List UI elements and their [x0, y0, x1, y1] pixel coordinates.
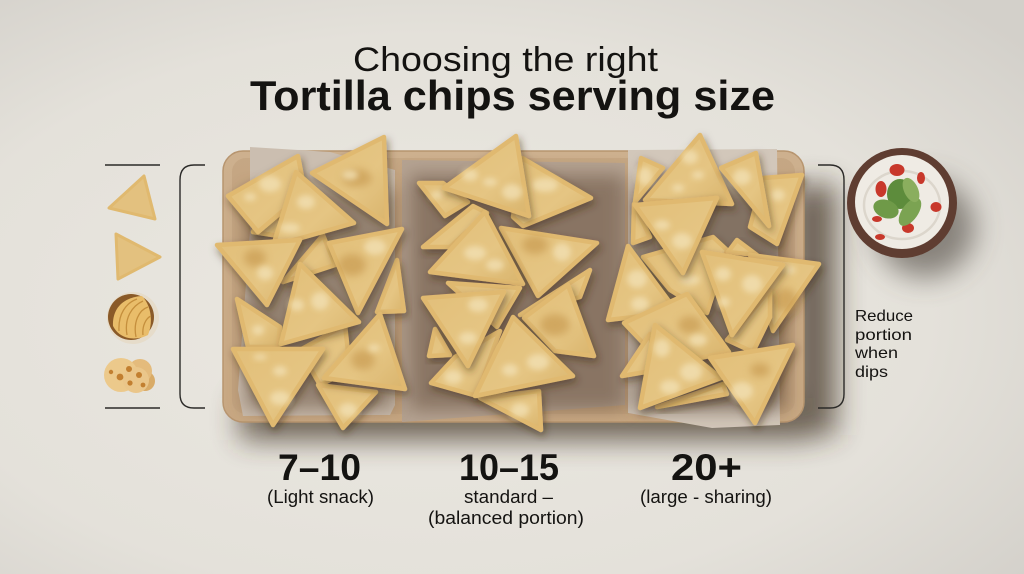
left bracket: [180, 165, 205, 408]
label: 10-15 standard: (balanced portion): [428, 508, 584, 528]
basil leaves: [871, 175, 926, 230]
label: 10-15 standard: 10–15: [459, 447, 559, 488]
label: 7-10 light snack: 7–10: [278, 447, 361, 488]
icon: lotus-shaped chips: [104, 358, 155, 393]
chip pile: 7-10 light snack: [217, 137, 405, 428]
icon: dip bowl with herbs: [847, 148, 957, 258]
title: Choosing the right: [353, 41, 659, 79]
tray shadow: [240, 185, 836, 440]
label: 7-10 light snack: (Light snack): [267, 487, 374, 507]
icon: tortilla chip 1: [109, 176, 155, 219]
wooden tray: [223, 151, 804, 422]
note: reduce portion when dips: [854, 308, 913, 381]
label: 10-15 standard: standard –: [464, 487, 553, 507]
icon: bowl of chips: [107, 292, 159, 344]
label: 20+ large sharing: 20+: [671, 447, 742, 488]
right bracket: [818, 165, 844, 408]
title: Tortilla chips serving size: [250, 72, 775, 119]
label: 20+ large sharing: (large - sharing): [640, 487, 772, 507]
note: reduce portion when dips: dips: [855, 364, 888, 381]
dip bowl shadow: [875, 178, 975, 278]
chip pile: 10-15 standard: [419, 136, 597, 430]
label: 10-15 standard: [428, 447, 584, 528]
left icon column rules: [105, 165, 160, 408]
label: 7-10 light snack: [267, 447, 374, 507]
label: 20+ large sharing: [640, 447, 772, 507]
title: [250, 41, 775, 119]
note: reduce portion when dips: when: [854, 345, 898, 362]
chip pile: 20+ large sharing: [608, 135, 819, 423]
parchment papers: [238, 147, 785, 428]
red peppers: [872, 164, 942, 240]
icon: tortilla chip 2: [116, 234, 160, 279]
note: reduce portion when dips: Reduce: [855, 308, 913, 325]
note: reduce portion when dips: portion: [855, 327, 912, 344]
